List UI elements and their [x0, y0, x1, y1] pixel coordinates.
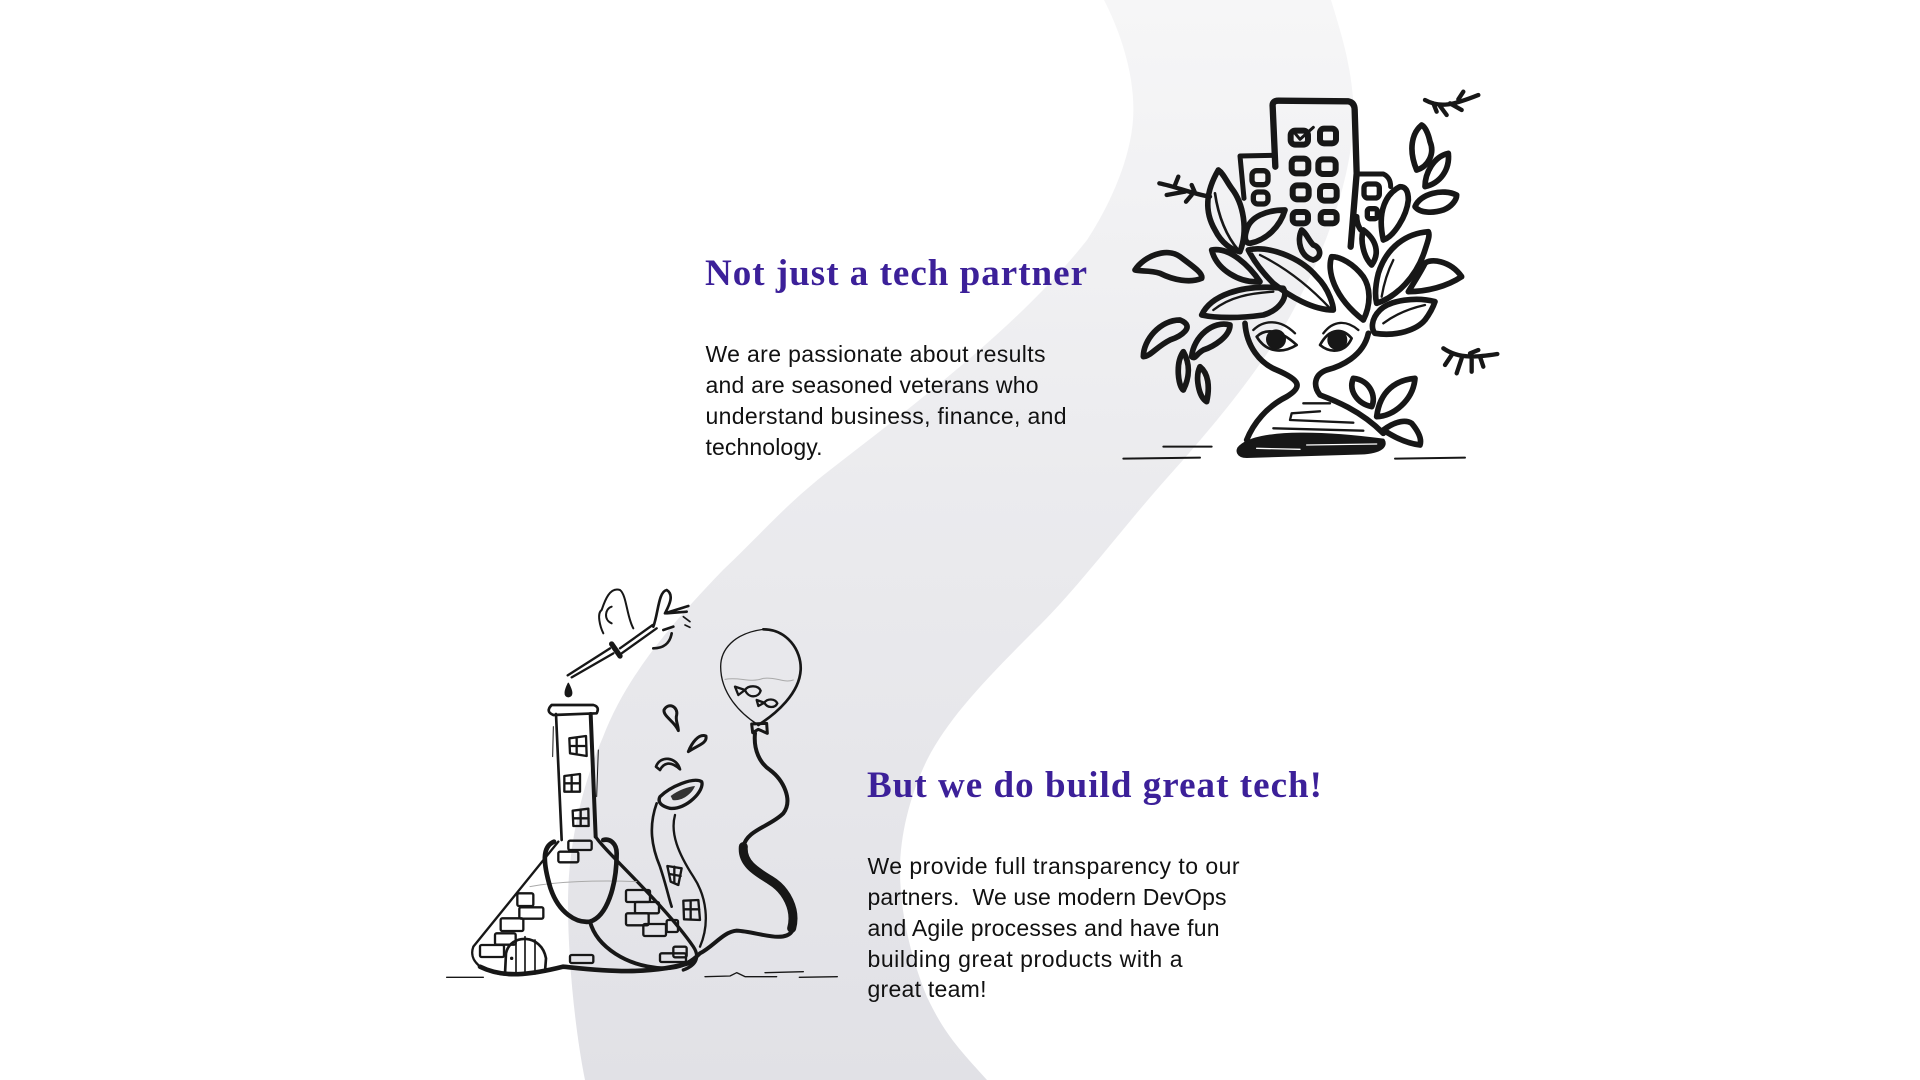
text block: results: and are seasoned veterans who	[706, 372, 1038, 398]
text block: results: We are passionate about results	[706, 341, 1046, 367]
icon: falling leaves left	[1135, 253, 1230, 402]
heading: not just a tech partner: Not just a tech partner	[705, 253, 1087, 294]
text block: transparency: great team!	[868, 976, 986, 1002]
text block: results	[706, 341, 1066, 460]
icon: bricks	[480, 841, 687, 963]
icon: worm with mouth and windows	[652, 780, 706, 947]
text block: transparency	[868, 853, 1240, 1002]
icon: droplets	[565, 683, 706, 770]
heading: but we do build great tech: But we do build great tech!	[867, 765, 1322, 806]
icon: sprigs	[1159, 92, 1497, 373]
ground lines	[447, 972, 837, 977]
icon: dropper and hand	[568, 589, 690, 677]
illustration: vase with city and leaves	[1123, 92, 1497, 459]
icon: vase face	[1245, 322, 1383, 440]
icon: flask neck and lip	[549, 705, 598, 840]
text block: transparency: building great products with a	[868, 946, 1183, 972]
text block: results: technology.	[706, 434, 822, 460]
text block: results: understand business, finance, and	[706, 403, 1066, 429]
icon: leaves upper right	[1412, 125, 1457, 212]
icon: arched door	[505, 937, 546, 974]
icon: flask body	[472, 837, 697, 975]
text block: transparency: and Agile processes and have fun	[868, 915, 1220, 941]
ground lines	[1123, 447, 1465, 459]
illustration: flask house with balloon	[447, 589, 837, 977]
text block: transparency: We provide full transparency to our	[868, 853, 1240, 879]
icon: leaves at base	[1352, 378, 1421, 445]
icon: balloon with fish	[721, 629, 801, 733]
icon: vase base and steps	[1238, 403, 1384, 457]
icon: crown of leaves	[1202, 170, 1462, 334]
icon: stethoscope tube	[545, 733, 794, 968]
text block: transparency: partners. We use modern DevOps	[868, 884, 1226, 910]
background ribbon	[568, 0, 1354, 1080]
icon: buildings	[1240, 101, 1391, 247]
